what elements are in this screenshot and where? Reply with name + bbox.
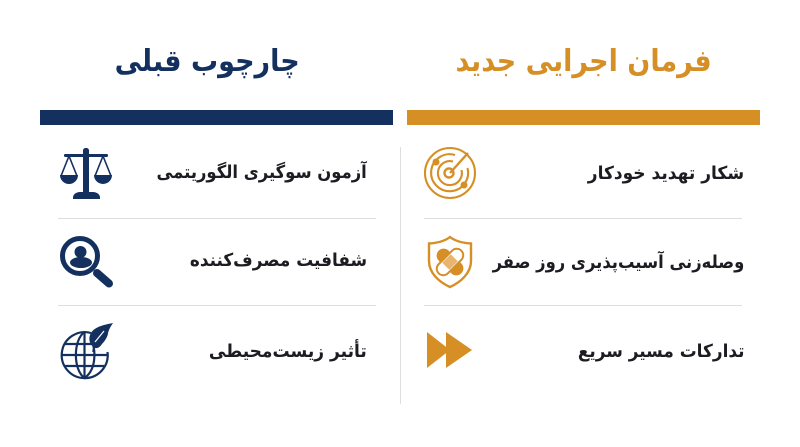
panel: previous framework items [60,148,368,380]
heading: previous framework: چارچوب قبلی [115,44,300,79]
heading: new executive order: فرمان اجرایی جدید [456,44,712,79]
icon: globe with leaf [60,323,113,380]
icon: magnifier with person [60,236,113,288]
icon: balance scale [60,148,112,199]
item text: automated threat hunting: شکار تهدید خودکار [588,163,744,184]
icon: shield with bandage [428,236,472,288]
icon: radar target [424,147,476,199]
header bar: new executive order [407,110,760,125]
icon: fast forward arrows [427,332,472,368]
item text: environmental impact: تأثیر زیست‌محیطی [209,341,367,362]
header bar: previous framework [40,110,393,125]
item text: algorithmic bias testing: آزمون سوگیری الگوریتمی [157,162,367,183]
panel: new executive order items [424,147,744,368]
item text: zero-day vulnerability patching: وصله‌زنی آسیب‌پذیری روز صفر [492,252,744,273]
item text: fast-track procurement: تدارکات مسیر سریع [577,341,744,362]
item text: consumer transparency: شفافیت مصرف‌کننده [190,250,367,271]
